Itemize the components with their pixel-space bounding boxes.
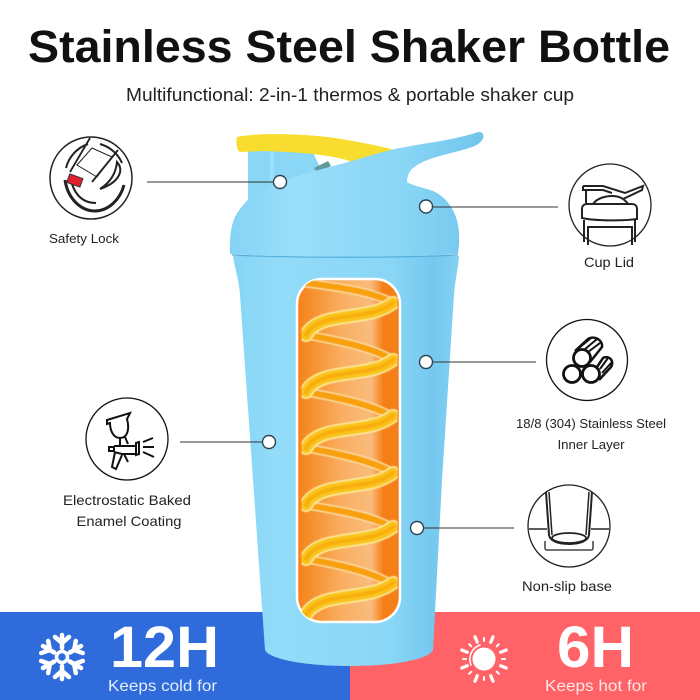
callout: enamel coating pointer bbox=[180, 436, 276, 448]
callout: stainless steel pointer bbox=[420, 356, 536, 368]
label: enamel coating bbox=[63, 492, 191, 529]
label: safety lock: Safety Lock bbox=[49, 232, 120, 246]
yellow flip cap bbox=[236, 134, 394, 162]
stat: 6H: 6H bbox=[557, 615, 634, 680]
label: non-slip base: Non-slip base bbox=[522, 578, 612, 594]
icon: sun bbox=[462, 637, 506, 681]
label: cup lid: Cup Lid bbox=[584, 254, 634, 270]
cup lid bbox=[230, 132, 483, 257]
bottle bbox=[230, 132, 483, 666]
inner window with spiral bbox=[297, 279, 400, 622]
title: Stainless Steel Shaker Bottle bbox=[28, 21, 670, 72]
label: enamel coating: Electrostatic Baked bbox=[63, 492, 191, 508]
icon: steel tubes bbox=[546, 320, 628, 400]
subtitle: Multifunctional: 2-in-1 thermos & portable shaker cup bbox=[126, 85, 574, 105]
caption: keeps cold: Keeps cold for bbox=[108, 678, 218, 695]
label: stainless steel: 18/8 (304) Stainless Steel bbox=[516, 416, 666, 431]
icon: cup lid bbox=[569, 164, 651, 246]
panel: keeps cold banner bbox=[0, 612, 350, 700]
stat: 12H: 12H bbox=[110, 615, 219, 680]
callout: cup lid pointer bbox=[420, 200, 558, 213]
caption: keeps hot: Keeps hot for bbox=[545, 678, 648, 695]
label: enamel coating: Enamel Coating bbox=[76, 513, 182, 529]
icon: snowflake bbox=[39, 635, 85, 679]
label: stainless steel: Inner Layer bbox=[558, 437, 625, 452]
icon: spray gun bbox=[86, 398, 168, 480]
bottle stem bbox=[248, 150, 322, 200]
icon: safety lock bbox=[50, 137, 132, 219]
callout: non-slip base pointer bbox=[410, 522, 514, 534]
bottle body bbox=[233, 256, 459, 666]
callout: safety lock pointer bbox=[147, 176, 286, 188]
label: stainless steel bbox=[516, 416, 666, 452]
icon: non-slip base bbox=[528, 485, 610, 567]
panel: keeps hot banner bbox=[350, 612, 700, 700]
